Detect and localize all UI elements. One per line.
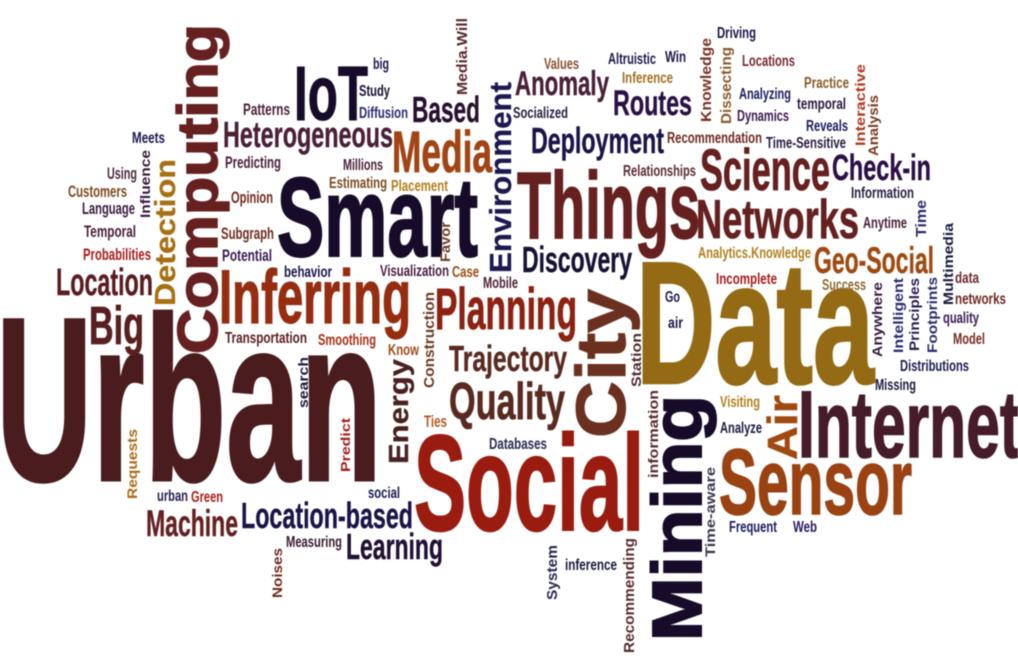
word: Intelligent: Intelligent xyxy=(890,278,906,353)
word: Model: Model xyxy=(953,331,985,348)
word: social: social xyxy=(368,485,400,502)
word: Analytics.Knowledge: Analytics.Knowledge xyxy=(698,245,811,262)
word: Measuring: Measuring xyxy=(286,534,342,551)
word: Databases: Databases xyxy=(489,436,547,453)
word: Construction: Construction xyxy=(421,292,438,388)
word: Driving: Driving xyxy=(717,25,756,42)
word: Analyzing: Analyzing xyxy=(739,86,791,103)
word: Inferring: Inferring xyxy=(219,255,411,340)
word: Predicting: Predicting xyxy=(225,153,281,172)
word: Based: Based xyxy=(412,89,480,130)
word: Computing: Computing xyxy=(166,24,230,354)
word: Analysis: Analysis xyxy=(865,95,881,156)
word: Win: Win xyxy=(665,49,686,66)
word: IoT: IoT xyxy=(294,51,368,137)
word: Deployment: Deployment xyxy=(531,120,664,161)
word: Study: Study xyxy=(359,83,390,100)
word: Detection: Detection xyxy=(150,159,182,306)
word: Smoothing: Smoothing xyxy=(318,332,376,349)
word: Transportation: Transportation xyxy=(225,330,307,347)
word: Time: Time xyxy=(913,200,930,237)
word: Estimating: Estimating xyxy=(329,175,387,192)
word: Distributions: Distributions xyxy=(900,358,969,375)
word: Influence: Influence xyxy=(137,150,153,218)
word: Altruistic: Altruistic xyxy=(608,51,656,68)
word: Networks: Networks xyxy=(696,188,859,250)
word: quality: quality xyxy=(943,310,979,327)
word: Anywhere: Anywhere xyxy=(869,282,885,357)
word: System: System xyxy=(544,545,561,600)
word: Discovery: Discovery xyxy=(522,239,632,280)
word: Success: Success xyxy=(822,277,866,294)
word: Language: Language xyxy=(82,199,135,218)
word: Data: Data xyxy=(636,225,875,420)
word: air: air xyxy=(668,315,683,332)
word: Check-in: Check-in xyxy=(832,147,931,188)
word: Recommendation: Recommendation xyxy=(667,130,762,147)
word: Web: Web xyxy=(793,519,817,536)
word: inference: inference xyxy=(565,557,617,574)
word: Interactive: Interactive xyxy=(852,64,868,146)
word: Opinion: Opinion xyxy=(231,188,273,207)
word: Probabilities: Probabilities xyxy=(83,245,151,264)
word: Analyze: Analyze xyxy=(720,420,762,437)
word: Station: Station xyxy=(628,333,644,387)
word: Missing: Missing xyxy=(875,377,916,394)
word: urban: urban xyxy=(157,488,188,505)
word: Green: Green xyxy=(191,489,223,506)
word: Frequent: Frequent xyxy=(729,519,777,536)
word: Mining: Mining xyxy=(638,395,716,641)
word: Values: Values xyxy=(544,56,579,73)
word: Recommending: Recommending xyxy=(621,538,638,653)
word: Planning: Planning xyxy=(435,277,577,342)
word: Machine: Machine xyxy=(146,503,238,544)
word: Smart: Smart xyxy=(277,155,478,280)
word: temporal: temporal xyxy=(797,96,846,113)
word: Reveals: Reveals xyxy=(806,118,848,135)
word: Knowledge: Knowledge xyxy=(698,38,715,122)
word: Customers: Customers xyxy=(68,182,127,201)
word: Meets: Meets xyxy=(132,130,165,147)
word: Predict: Predict xyxy=(338,417,353,472)
word: Temporal: Temporal xyxy=(84,222,136,241)
word: Trajectory: Trajectory xyxy=(449,338,567,379)
word: Footprints: Footprints xyxy=(924,277,940,353)
word: Diffusion: Diffusion xyxy=(359,105,408,122)
word: Things: Things xyxy=(517,153,700,259)
word: Millions: Millions xyxy=(343,157,383,174)
word: Socialized: Socialized xyxy=(513,105,568,122)
word: behavior: behavior xyxy=(284,264,332,281)
word: Anomaly: Anomaly xyxy=(515,65,609,103)
word: Placement: Placement xyxy=(391,178,448,195)
word: Geo-Social: Geo-Social xyxy=(814,240,934,281)
word: Practice: Practice xyxy=(804,75,849,92)
word: Mobile: Mobile xyxy=(483,275,518,292)
word: Requests: Requests xyxy=(124,429,140,499)
word: Visiting: Visiting xyxy=(720,394,760,411)
word: Location-based: Location-based xyxy=(241,495,413,536)
word: Science: Science xyxy=(700,138,830,203)
word: Location: Location xyxy=(56,262,153,304)
word: Routes: Routes xyxy=(613,84,692,123)
word: Patterns: Patterns xyxy=(243,100,290,119)
word: Relationships: Relationships xyxy=(623,163,696,180)
word: City: City xyxy=(562,289,640,438)
word: Know: Know xyxy=(388,342,419,359)
word: Locations: Locations xyxy=(742,53,795,70)
word: Dynamics: Dynamics xyxy=(737,108,789,125)
word: information: information xyxy=(645,390,661,478)
word: Potential: Potential xyxy=(222,246,272,265)
word: Quality: Quality xyxy=(449,373,565,431)
word: Time-aware: Time-aware xyxy=(702,467,718,557)
word: Time-Sensitive: Time-Sensitive xyxy=(766,135,846,152)
word: Inference: Inference xyxy=(622,70,673,87)
word: Ties: Ties xyxy=(424,412,447,431)
word: Dissecting: Dissecting xyxy=(718,47,735,124)
word: Principles: Principles xyxy=(906,278,922,351)
word: Anytime: Anytime xyxy=(863,215,907,232)
word: Media: Media xyxy=(392,120,492,185)
word: Learning: Learning xyxy=(346,526,443,567)
word: Big: Big xyxy=(89,296,144,356)
word: Social: Social xyxy=(414,407,644,559)
word: Favor: Favor xyxy=(437,221,453,262)
word: data: data xyxy=(955,270,979,287)
word: Noises: Noises xyxy=(269,548,285,598)
word: Information: Information xyxy=(851,185,914,202)
word: Urban: Urban xyxy=(0,270,382,530)
word: Using: Using xyxy=(107,164,137,183)
word: Energy: Energy xyxy=(383,359,414,464)
word: Go: Go xyxy=(665,289,680,306)
word: Heterogeneous: Heterogeneous xyxy=(223,114,393,155)
word: Multimedia: Multimedia xyxy=(940,223,956,305)
word: Subgraph: Subgraph xyxy=(221,224,274,243)
word: Incomplete: Incomplete xyxy=(716,271,777,288)
word: Environment: Environment xyxy=(483,82,518,273)
word: Case: Case xyxy=(452,264,479,281)
word: search: search xyxy=(295,357,311,408)
word: Visualization: Visualization xyxy=(380,263,449,280)
word: Media.Will: Media.Will xyxy=(454,18,471,95)
word: Air: Air xyxy=(759,395,806,460)
word: big: big xyxy=(373,56,389,73)
